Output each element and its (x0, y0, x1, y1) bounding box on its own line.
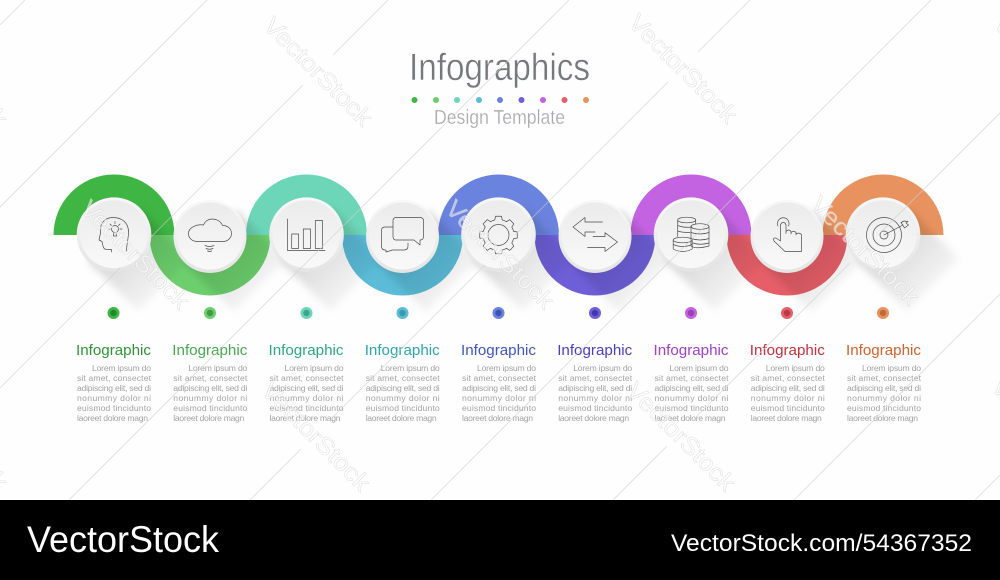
text column 1: laoreet dolore magn (77, 413, 148, 423)
text column 4: Infographic (365, 343, 440, 359)
text column 2: Infographic (172, 343, 247, 359)
watermarks: VectorStock (440, 195, 560, 315)
text column 4: laoreet dolore magn (366, 413, 437, 423)
text column 7 (654, 343, 729, 423)
text column 2 (172, 343, 248, 423)
text column 9: Infographic (846, 343, 921, 359)
text column 5: Infographic (461, 343, 536, 359)
text column 7: Infographic (654, 343, 728, 359)
text column 5 (461, 343, 537, 423)
text column 1: euismod tincidunto (77, 403, 151, 413)
text column 3: euismod tincidunto (270, 403, 344, 413)
text column 3: sit amet, consectet (270, 373, 344, 383)
text column 6 (557, 343, 633, 423)
text column 3: nonummy dolor ni (270, 393, 344, 403)
footer bar (0, 500, 1000, 580)
text column 8: sit amet, consectet (751, 373, 825, 383)
circle 6 with arrows icon (558, 200, 632, 273)
text column 2: sit amet, consectet (173, 373, 248, 383)
text column 2: adipiscing elit, sed di (173, 383, 247, 393)
text column 8: Lorem ipsum do (766, 363, 825, 373)
text column 4: adipiscing elit, sed di (366, 383, 440, 393)
text column 6: sit amet, consectet (558, 373, 633, 383)
text column 7: laoreet dolore magn (654, 413, 726, 423)
text column 3: Infographic (268, 343, 344, 359)
watermarks: VectorStock (258, 12, 378, 132)
text column 1: adipiscing elit, sed di (77, 383, 151, 393)
icon: head with light bulb (99, 218, 128, 252)
step dots (108, 307, 889, 319)
footer brand: VectorStock (27, 519, 219, 560)
text column 5: euismod tincidunto (462, 403, 536, 413)
wave ribbon (54, 174, 944, 296)
text column 6: Lorem ipsum do (573, 363, 632, 373)
text column 6: euismod tincidunto (558, 403, 632, 413)
circle 1 with head icon (77, 197, 151, 272)
icon: coin stacks (673, 217, 709, 252)
text column 8 (750, 343, 825, 423)
text column 1: Infographic (76, 343, 151, 359)
text column 5: laoreet dolore magn (462, 413, 533, 423)
text column 5: sit amet, consectet (462, 373, 537, 383)
circle 8 with hand icon (750, 200, 824, 273)
text column 3: Lorem ipsum do (284, 363, 344, 373)
text column 8: adipiscing elit, sed di (751, 383, 825, 393)
circle 5 with gear icon (461, 197, 536, 272)
circle 9 with target icon (846, 197, 920, 272)
title: Infographics (409, 47, 590, 89)
text column 6: laoreet dolore magn (558, 413, 629, 423)
text column 2: nonummy dolor ni (173, 393, 247, 403)
watermarks: VectorStock (256, 377, 376, 497)
text column 4: nonummy dolor ni (366, 393, 440, 403)
text column 7: adipiscing elit, sed di (654, 383, 729, 393)
text column 9 (846, 343, 922, 423)
text column 4: sit amet, consectet (366, 373, 440, 383)
circle 3 with bar chart icon (269, 197, 344, 272)
text column 4: euismod tincidunto (366, 403, 440, 413)
text column 9: sit amet, consectet (847, 373, 922, 383)
text column 9: adipiscing elit, sed di (847, 383, 921, 393)
icon: cloud (188, 219, 232, 251)
text column 6: adipiscing elit, sed di (558, 383, 632, 393)
text column 4 (365, 343, 440, 423)
watermarks: VectorStock (75, 195, 195, 315)
text column 6: nonummy dolor ni (558, 393, 632, 403)
circle 7 with coins icon (654, 197, 728, 272)
text column 9: Lorem ipsum do (862, 363, 921, 373)
icon: speech bubbles (382, 218, 424, 252)
icon: target with arrow (866, 218, 908, 252)
text column 5: adipiscing elit, sed di (462, 383, 536, 393)
text column 7: nonummy dolor ni (654, 393, 729, 403)
watermarks: VectorStock (623, 9, 743, 129)
icon: bar chart (288, 219, 325, 250)
text column 5: nonummy dolor ni (462, 393, 536, 403)
watermarks: VectorStock (805, 191, 925, 311)
text column 1: nonummy dolor ni (77, 393, 151, 403)
text column 8: nonummy dolor ni (751, 393, 825, 403)
text column 8: laoreet dolore magn (751, 413, 822, 423)
watermarks: VectorStock (621, 377, 741, 497)
text column 3 (268, 343, 344, 423)
text column 4: Lorem ipsum do (381, 363, 440, 373)
subtitle: Design Template (434, 107, 565, 129)
text column 8: Infographic (750, 343, 825, 359)
text column 2: Lorem ipsum do (188, 363, 248, 373)
text column 7: Lorem ipsum do (670, 363, 729, 373)
text column 7: sit amet, consectet (654, 373, 729, 383)
text column 9: laoreet dolore magn (847, 413, 918, 423)
text column 7: euismod tincidunto (654, 403, 729, 413)
icon: exchange arrows (573, 218, 618, 252)
title dots row (412, 97, 589, 103)
text column 1: Lorem ipsum do (92, 363, 151, 373)
icon: pointing hand (774, 218, 802, 252)
text column 8: euismod tincidunto (751, 403, 825, 413)
text column 9: nonummy dolor ni (847, 393, 921, 403)
circle 2 with cloud icon (174, 200, 246, 273)
text column 5: Lorem ipsum do (477, 363, 536, 373)
footer url: VectorStock.com/54367352 (671, 530, 972, 557)
circle 4 with speech bubbles icon (366, 200, 439, 273)
text column 1: sit amet, consectet (77, 373, 152, 383)
text column 9: euismod tincidunto (847, 403, 921, 413)
icon: gear (480, 216, 517, 254)
text column 3: laoreet dolore magn (270, 413, 341, 423)
circle shadows (88, 209, 959, 312)
text column 1 (76, 343, 152, 423)
text column 2: laoreet dolore magn (173, 413, 245, 423)
text column 2: euismod tincidunto (173, 403, 248, 413)
text column 3: adipiscing elit, sed di (270, 383, 344, 393)
text column 6: Infographic (557, 343, 632, 359)
